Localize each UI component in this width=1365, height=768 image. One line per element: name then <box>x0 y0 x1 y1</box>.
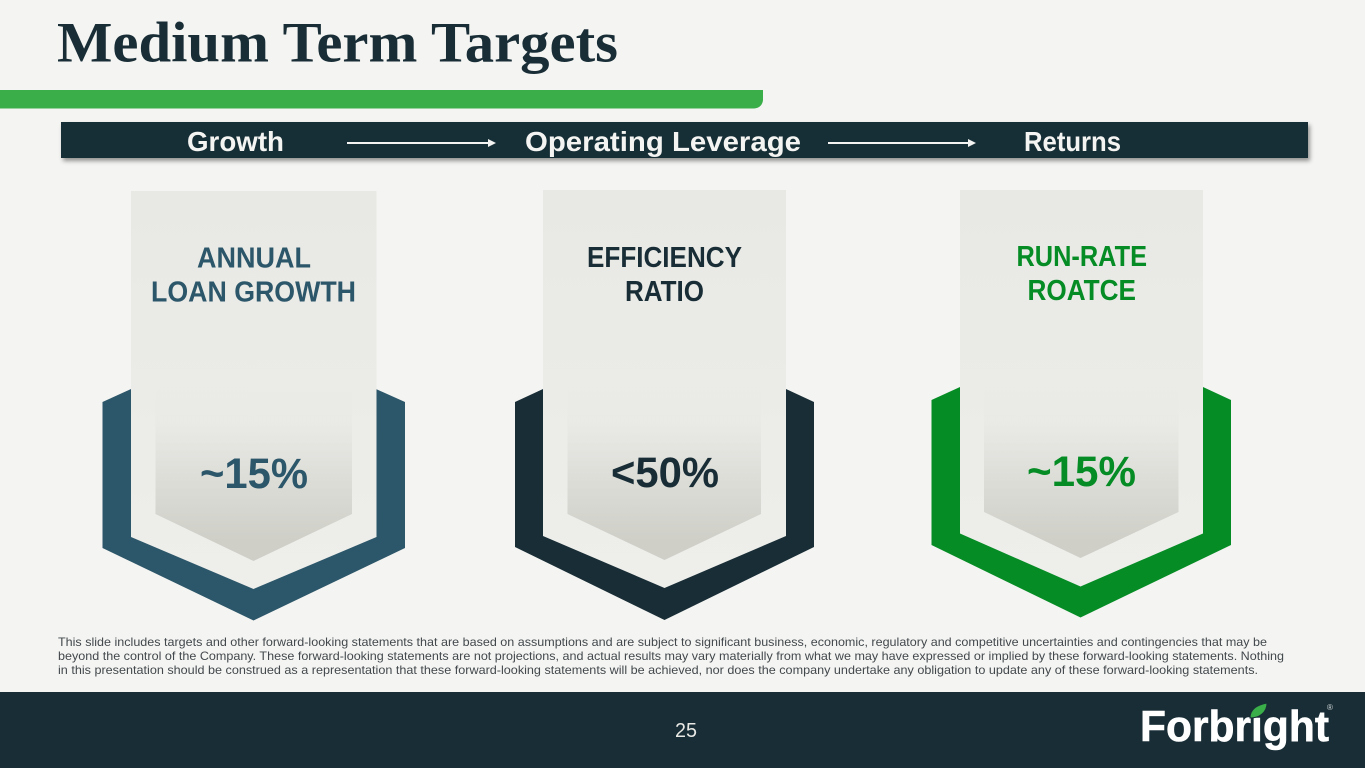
logo wordmark: Forbright <box>1140 702 1329 751</box>
heading <box>587 242 742 308</box>
disclaimer text: beyond the control of the Company. These forward-looking statements are not projections, and actual results may vary materially from what we may have expressed or implied by these forward-looking statements. Nothing <box>58 650 1284 663</box>
heading <box>1016 241 1147 307</box>
heading: ANNUAL <box>197 242 311 274</box>
value: <50% <box>611 449 719 497</box>
pale panel <box>131 191 376 589</box>
heading: EFFICIENCY <box>587 242 742 274</box>
heading: RUN-RATE <box>1016 241 1147 273</box>
pale panel <box>960 190 1203 586</box>
panel: annual loan growth <box>102 191 405 620</box>
heading: RATIO <box>625 276 704 308</box>
disclaimer text <box>58 636 1284 677</box>
page number: 25 <box>675 720 697 742</box>
heading: LOAN GROWTH <box>151 276 356 308</box>
progression banner <box>61 122 1308 158</box>
footer bar <box>0 692 1365 768</box>
value: ~15% <box>1027 448 1136 496</box>
disclaimer text: This slide includes targets and other forward-looking statements that are based on assumptions and are subject to significant business, economic, regulatory and competitive uncertainties and contingencies that may be <box>58 636 1267 649</box>
arrow: growth to operating leverage <box>347 139 496 147</box>
registered mark: ® <box>1327 703 1333 712</box>
inner gradient shape <box>568 384 761 560</box>
banner label: growth: Growth <box>187 126 284 157</box>
banner label: operating leverage: Operating Leverage <box>525 126 801 157</box>
banner background <box>61 122 1308 158</box>
heading <box>151 242 356 308</box>
inner gradient shape <box>156 385 352 561</box>
logo: Forbright <box>1140 702 1333 751</box>
panel: efficiency ratio <box>515 190 814 620</box>
title: Medium Term Targets <box>57 12 618 74</box>
inner gradient shape <box>984 382 1178 558</box>
heading: ROATCE <box>1028 275 1136 307</box>
shield outline <box>515 389 814 620</box>
shield outline <box>102 389 405 620</box>
icon: leaf <box>1250 703 1267 718</box>
panel: run-rate roatce <box>932 190 1231 618</box>
value: ~15% <box>200 450 308 498</box>
green title bar <box>0 90 763 109</box>
pale panel <box>543 190 786 588</box>
banner label: returns: Returns <box>1024 126 1121 157</box>
disclaimer text: in this presentation should be construed as a representation that these forward-looking statements will be achieved, nor does the company undertake any obligation to update any of these forward-looking statements. <box>58 664 1258 677</box>
shield outline <box>932 387 1231 618</box>
arrow: operating leverage to returns <box>828 139 976 147</box>
